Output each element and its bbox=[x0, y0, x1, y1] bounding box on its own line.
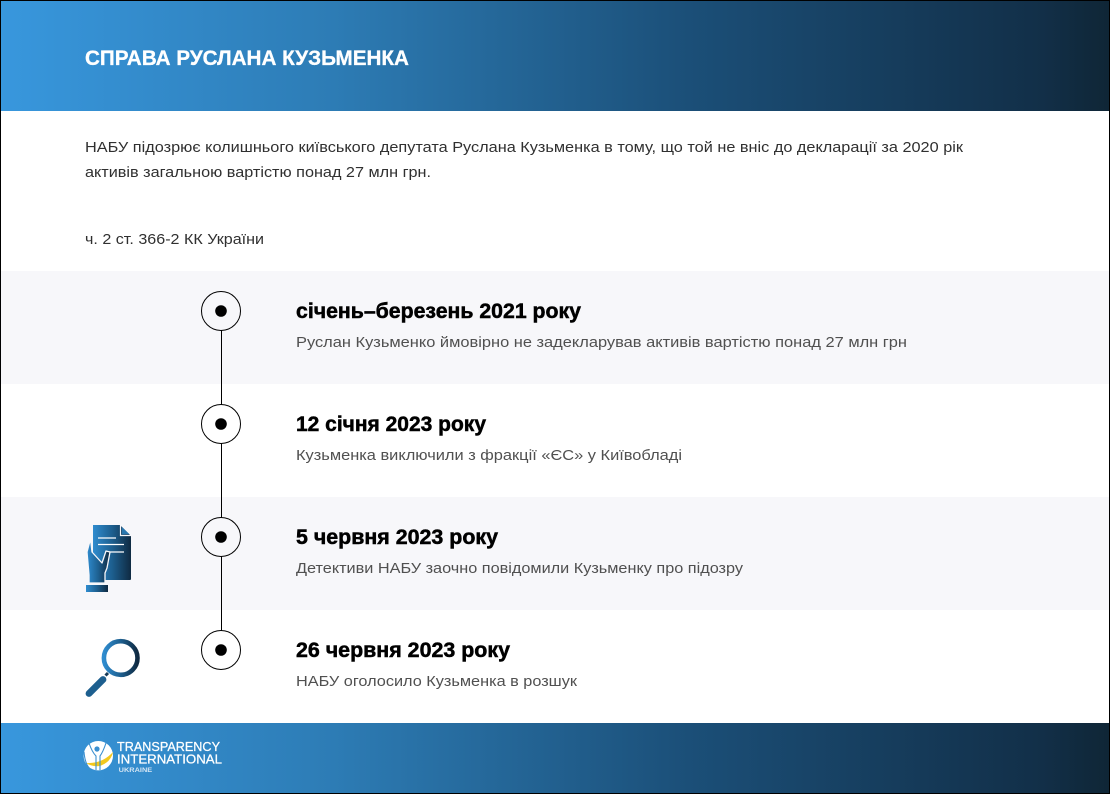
logo: Transparency International Ukraine: TRANSPARENCY bbox=[117, 740, 221, 754]
intro text bbox=[85, 139, 963, 181]
timeline node 3 bbox=[202, 518, 240, 556]
timeline node 1 bbox=[202, 292, 240, 330]
logo: Transparency International Ukraine: UKRAINE bbox=[119, 767, 153, 774]
title: СПРАВА РУСЛАНА КУЗЬМЕНКА bbox=[85, 47, 409, 70]
logo: Transparency International Ukraine bbox=[84, 740, 222, 774]
event 2 bbox=[296, 413, 682, 464]
intro text: активів загальною вартістю понад 27 млн грн. bbox=[85, 164, 431, 181]
event 3: Детективи НАБУ заочно повідомили Кузьменку про підозру bbox=[296, 560, 744, 577]
event 4: НАБУ оголосило Кузьменка в розшук bbox=[296, 673, 577, 690]
event 1: січень–березень 2021 року bbox=[296, 300, 581, 323]
event 2: Кузьменка виключили з фракції «ЄС» у Київобладі bbox=[296, 447, 682, 464]
event 1: Руслан Кузьменко ймовірно не задекларував активів вартістю понад 27 млн грн bbox=[296, 334, 907, 351]
timeline node 2 bbox=[202, 404, 240, 444]
event 2: 12 січня 2023 року bbox=[296, 413, 486, 436]
legal article reference: ч. 2 ст. 366-2 КК України bbox=[85, 231, 264, 248]
timeline node 4 bbox=[202, 630, 240, 670]
event 4 bbox=[296, 639, 577, 690]
event 3 bbox=[296, 526, 744, 577]
event 3: 5 червня 2023 року bbox=[296, 526, 498, 549]
footer band bbox=[1, 723, 1109, 793]
header band bbox=[1, 1, 1109, 111]
intro text: НАБУ підозрює колишнього київського депутата Руслана Кузьменка в тому, що той не вніс до декларації за 2020 рік bbox=[85, 139, 963, 156]
icon: hand holding document bbox=[86, 525, 131, 592]
event 1 bbox=[296, 300, 907, 351]
icon: magnifying glass bbox=[89, 641, 138, 694]
logo: Transparency International Ukraine: INTERNATIONAL bbox=[117, 752, 222, 766]
timeline row backgrounds bbox=[1, 271, 1109, 610]
event 4: 26 червня 2023 року bbox=[296, 639, 510, 662]
timeline connector bbox=[220, 311, 222, 650]
